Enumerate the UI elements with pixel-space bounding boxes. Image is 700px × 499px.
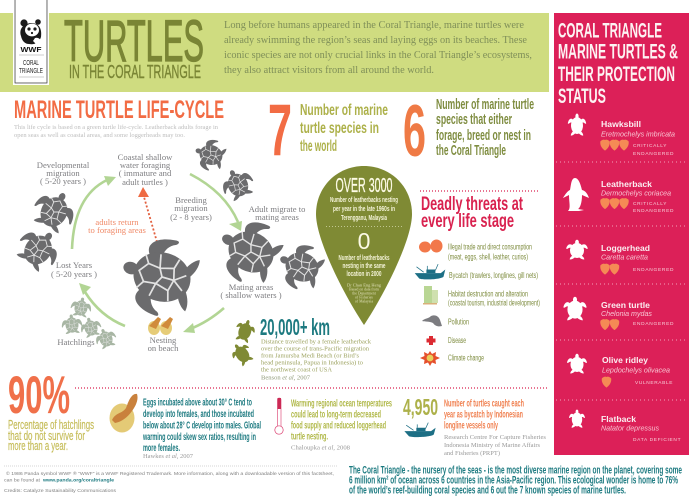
pin text 2: location in 2000 xyxy=(346,271,382,278)
threat: climate: Climate change xyxy=(448,354,484,362)
species: hawksbill: CRITICALLY xyxy=(633,143,667,149)
text: warming: turtle nesting. xyxy=(291,432,328,442)
text: warming xyxy=(291,398,392,452)
species: hawksbill: ENDANGERED xyxy=(633,151,674,157)
logo name xyxy=(19,58,43,75)
footer credits: Credits: Catalyze Sustainability Communications xyxy=(4,488,117,494)
species: hawksbill: Eretmochelys imbricata xyxy=(601,132,675,138)
species: loggerhead: Caretta caretta xyxy=(601,254,648,262)
turtle: mating small xyxy=(272,237,328,295)
cycle labels: migration xyxy=(174,203,208,213)
stat: 7 species: Number of marine xyxy=(300,102,388,119)
turtle: developmental xyxy=(28,184,82,237)
stat: 90%: 90% xyxy=(8,366,70,425)
bycatch source: Indonesia Ministry of Marine Affairs xyxy=(444,442,541,449)
icon: nesting eggs xyxy=(148,317,173,335)
threats heading: every life stage xyxy=(421,210,514,232)
life-cycle note xyxy=(14,124,218,139)
threats heading: Deadly threats at xyxy=(421,193,523,215)
cycle labels: Lost Years xyxy=(56,260,93,270)
icon: shells xyxy=(419,240,442,252)
stat: 20,000+ km: Distance travelled by a female leatherback xyxy=(261,338,372,346)
stat: 7 species: turtle species in xyxy=(300,120,379,137)
stat: 6 species xyxy=(403,91,534,172)
pin text 1: Terengganu, Malaysia xyxy=(341,215,387,222)
threat: pollution: Pollution xyxy=(448,318,469,326)
bycatch source: and Fisheries (PRPT) xyxy=(444,450,500,457)
stat: 7 species: the world xyxy=(300,138,337,155)
footer credits: www.panda.org/coraltriangle xyxy=(42,478,114,484)
heading: life-cycle: MARINE TURTLE LIFE-CYCLE xyxy=(14,96,224,124)
intro text: Long before humans appeared in the Coral Triangle, marine turtles were xyxy=(224,20,524,31)
stat: 6 species: 6 xyxy=(403,91,426,172)
species: flatback: Natator depressus xyxy=(601,426,660,432)
text: coral triangle summary xyxy=(349,464,682,496)
panel heading: STATUS xyxy=(558,85,606,108)
icon: thermometer xyxy=(275,398,283,434)
arrow: breeding migration xyxy=(190,174,242,231)
turtle: mating large xyxy=(208,209,289,292)
panel heading xyxy=(558,20,678,108)
pin text 1 xyxy=(330,197,398,222)
species: olive ridley xyxy=(567,354,673,388)
turtle: lost years xyxy=(11,221,67,276)
turtle: adult centre xyxy=(113,229,204,323)
threat: trade: (meat, eggs, shell, leather, curios) xyxy=(448,252,528,262)
pin source: the Department xyxy=(352,292,377,296)
stat: 20,000+ km: head peninsula, Papua in Indonesia) to xyxy=(261,360,363,366)
stat: 6 species: Number of marine turtle xyxy=(436,97,534,113)
title: IN THE CORAL TRIANGLE xyxy=(69,61,201,82)
stat: 20,000+ km xyxy=(228,314,372,382)
stat: 20,000+ km: over the course of trans-Pacific migration xyxy=(261,346,369,352)
species: hawksbill: Hawksbill xyxy=(601,119,641,129)
icon: olive turtles xyxy=(228,317,258,368)
species: leatherback: CRITICALLY xyxy=(633,201,667,207)
stat: 90%: more than a year. xyxy=(8,438,68,453)
logo name: CORAL xyxy=(23,58,39,67)
species: olive ridley: Olive ridley xyxy=(602,355,648,365)
pin source: of Fisheries xyxy=(355,296,373,300)
stat: 20,000+ km: the northwest coast of USA xyxy=(261,366,333,374)
turtle: foraging 2 xyxy=(217,164,258,203)
title: TURTLES xyxy=(64,9,204,74)
species: olive ridley: Lepdochelys olivacea xyxy=(602,368,670,374)
arrow: mating to nesting xyxy=(183,308,224,333)
stat: 20,000+ km: Benson et al, 2007 xyxy=(261,374,310,382)
text: egg incubation: develop into females, and those incubated xyxy=(143,409,254,420)
cycle labels: (2 - 8 years) xyxy=(170,212,212,222)
species: green turtle xyxy=(563,297,674,330)
species: loggerhead: ENDANGERED xyxy=(633,267,674,273)
pin source: Based on data from xyxy=(349,288,379,292)
text: egg incubation: more females. xyxy=(143,443,180,454)
cycle labels: ( 5-20 years ) xyxy=(51,269,97,279)
stat: 7 species: 7 xyxy=(268,90,292,171)
cycle labels xyxy=(37,152,305,353)
stat: 90%: that do not survive for xyxy=(8,428,85,443)
bycatch text: year as bycatch by Indonesian xyxy=(444,410,523,420)
bycatch source: Research Centre For Capture Fisheries xyxy=(444,435,547,441)
stat: 6 species: the Coral Triangle xyxy=(436,143,506,159)
species: flatback: DATA DEFICIENT xyxy=(633,437,681,443)
cycle labels: water foraging xyxy=(120,160,171,170)
pin text 2: Number of leatherbacks xyxy=(338,255,390,262)
icon: panda xyxy=(20,19,41,44)
arrow: lost years to foraging xyxy=(72,176,116,249)
pin stat zero: 0 xyxy=(358,228,370,254)
cycle labels: ( immature and xyxy=(119,168,172,178)
panel: deadly threats xyxy=(415,191,540,366)
label: adults return: adults return xyxy=(95,217,139,227)
intro text xyxy=(224,20,532,76)
species: flatback xyxy=(569,410,681,443)
cycle labels: Breeding xyxy=(175,195,207,205)
text: egg incubation: Eggs incubated above about 30° C tend to xyxy=(143,398,252,408)
species: leatherback: Leatherback xyxy=(601,179,652,189)
species: olive ridley: VULNERABLE xyxy=(635,380,673,386)
text: warming: food supply and reduced loggerhead xyxy=(291,420,386,432)
stat: 90%: Percentage of hatchlings xyxy=(8,417,94,432)
species: green turtle: ENDANGERED xyxy=(633,321,674,327)
icon: buildings xyxy=(423,286,438,304)
cycle labels: migration xyxy=(46,168,80,178)
footer credits: © 1986 Panda symbol WWF ® “WWF” is a WWF Registered Trademark. More information, along with a downloadable version of this factsheet, xyxy=(6,470,334,477)
bycatch text: Number of turtles caught each xyxy=(444,398,524,410)
icon: pollution cloud xyxy=(422,315,442,326)
cycle labels: adult turtles ) xyxy=(122,177,168,187)
cycle labels: Adult migrate to xyxy=(249,204,305,214)
stat: 90% xyxy=(8,366,94,453)
bycatch text: longline vessels only xyxy=(444,420,498,432)
life-cycle note: This life cycle is based on a green turtle life-cycle. Leatherback adults forage in xyxy=(14,124,218,131)
pin text 1: Number of leatherbacks nesting xyxy=(330,197,398,204)
bycatch source xyxy=(444,435,547,457)
stat: 4,950 xyxy=(403,394,547,457)
cycle labels: on beach xyxy=(148,343,179,353)
cycle labels: Nesting xyxy=(150,335,177,345)
pin source: Dr Chan Eng Heng xyxy=(347,282,382,288)
arrow: nesting to lost years xyxy=(79,283,125,326)
species: leatherback: ENDANGERED xyxy=(633,208,674,214)
text: egg incubation: warming could skew sex ratios, resulting in xyxy=(142,432,256,443)
chart: life-cycle diagram xyxy=(11,135,328,353)
threat: trade xyxy=(448,242,532,262)
threat: habitat: Habitat destruction and alteration xyxy=(448,290,528,298)
species: leatherback xyxy=(563,178,674,214)
intro text: they also attract visitors from all around the world. xyxy=(224,65,434,76)
pin stat over 3000: OVER 3000 xyxy=(336,175,392,197)
pin source: of Malaysia xyxy=(355,300,373,304)
text: warming: could lead to long-term decreased xyxy=(291,410,381,420)
stat: 7 species xyxy=(268,90,388,171)
bycatch text xyxy=(444,398,524,432)
footer credits xyxy=(4,470,334,494)
icon: fishing boat xyxy=(404,423,436,437)
stat: 20,000+ km: from Jamursba Medi Beach (or Bird’s xyxy=(261,352,360,360)
footer credits: can be found at xyxy=(4,478,41,484)
species: green turtle: Chelonia mydas xyxy=(601,311,652,318)
cycle labels: Hatchlings xyxy=(57,337,95,347)
hatchlings xyxy=(61,296,119,350)
species: green turtle: Green turtle xyxy=(601,300,650,310)
intro text: already swimming the region’s seas and laying eggs on its beaches. These xyxy=(224,35,527,46)
intro text: iconic species are not only crucial links in the Coral Triangle’s ecosystems, xyxy=(224,50,532,61)
turtle: foraging 1 xyxy=(191,135,228,174)
species: hawksbill xyxy=(568,114,675,157)
icon: climate sun xyxy=(420,351,440,366)
text: warming: Warming regional ocean temperatures xyxy=(291,398,392,410)
cycle labels: Mating areas xyxy=(229,282,274,292)
WWF logo card xyxy=(13,0,49,85)
species: loggerhead: Loggerhead xyxy=(601,243,650,253)
threats heading xyxy=(421,193,523,232)
threat: disease: Disease xyxy=(448,336,466,345)
callout: leatherback pin xyxy=(316,166,412,325)
icon: disease cross xyxy=(426,336,436,345)
icon: ship xyxy=(415,264,445,279)
life-cycle note: open seas as well as coastal areas, and some loggerheads may too. xyxy=(14,133,186,139)
species: flatback: Flatback xyxy=(601,414,636,424)
pin source xyxy=(347,282,382,304)
cycle labels: mating areas xyxy=(255,212,299,222)
threat: habitat: (coastal tourism, industrial development) xyxy=(448,298,540,308)
species: loggerhead xyxy=(566,240,674,275)
stat: 6 species: species that either xyxy=(436,112,512,128)
text: egg incubation xyxy=(142,398,261,460)
cycle labels: Coastal shallow xyxy=(118,152,173,162)
title xyxy=(64,9,204,82)
text: egg incubation: below about 28° C develop into males. Global xyxy=(143,420,261,432)
arrow: adults return xyxy=(138,187,157,242)
threat: trade: Illegal trade and direct consumption xyxy=(448,242,532,252)
pin text 2 xyxy=(338,255,390,278)
cycle labels: ( shallow waters ) xyxy=(220,290,282,300)
logo name: TRIANGLE xyxy=(19,66,43,75)
cycle labels: ( 5-20 years ) xyxy=(40,176,86,186)
icon: egg with hatchling xyxy=(110,394,138,432)
threat: habitat xyxy=(448,290,540,308)
panel: protection status xyxy=(554,13,689,455)
header band xyxy=(0,13,549,92)
text: egg incubation: Hawkes et al, 2007 xyxy=(143,454,193,460)
label: adults return xyxy=(88,217,147,235)
label: adults return: to foraging areas xyxy=(88,225,147,235)
stat: 20,000+ km: 20,000+ km xyxy=(260,314,330,340)
threat: bycatch: Bycatch (trawlers, longlines, gill nets) xyxy=(449,271,538,280)
pin text 1: per year in the late 1960s in xyxy=(333,206,395,213)
cycle labels: Developmental xyxy=(37,160,90,170)
stat: 4,950: 4,950 xyxy=(403,394,438,420)
logo wordmark: WWF xyxy=(20,45,42,54)
stat: 6 species: forage, breed or nest in xyxy=(436,128,531,144)
species: leatherback: Dermochelys coriacea xyxy=(601,190,671,198)
text: warming: Chaloupka et al, 2008 xyxy=(291,446,350,452)
pin text 2: nesting in the same xyxy=(342,263,386,270)
